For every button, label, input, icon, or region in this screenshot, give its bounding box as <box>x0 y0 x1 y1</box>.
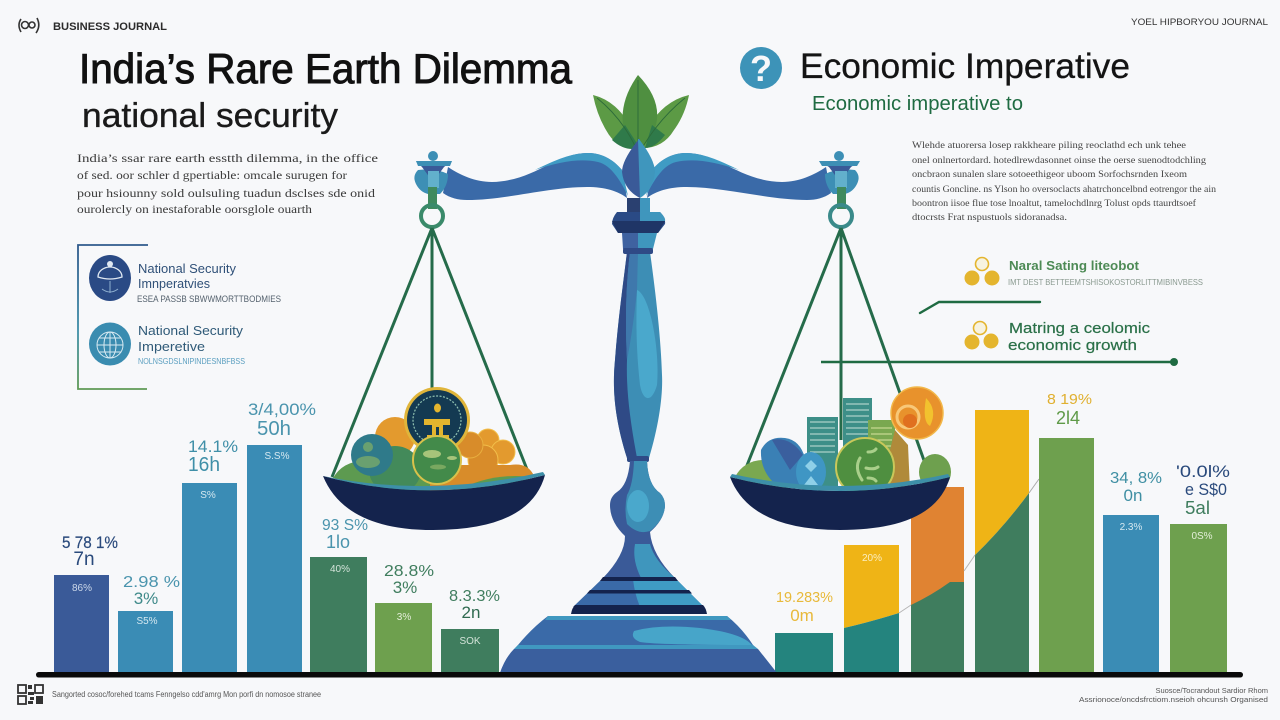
title: India’s Rare Earth Dilemma <box>79 45 573 92</box>
text block: economic paragraph <box>912 141 1216 223</box>
bar 5: 1lo <box>326 532 350 552</box>
bar 4 <box>247 400 316 673</box>
bar 2: S5% <box>136 616 158 627</box>
bar 5 <box>310 517 368 673</box>
bar 1: 0m <box>790 606 814 625</box>
bowl <box>730 477 950 530</box>
bar 4: 3/4,00% <box>248 400 316 419</box>
text: second imperative: NOLNSGDSLNIPINDESNBFBSS <box>138 357 245 366</box>
bar 6: 0n <box>1124 486 1142 505</box>
bar 1: 7n <box>73 549 95 570</box>
bar 7: SOK <box>459 636 481 647</box>
bar 7: 2n <box>462 603 480 622</box>
icon: leaves <box>593 75 689 150</box>
text block: economic paragraph: oncbraon sunalen slare sotoeethigeor uboom Sorfochsrnden Ixeom <box>912 169 1188 180</box>
icon: question mark <box>740 47 782 89</box>
text: first imperative: National Security <box>138 261 236 276</box>
text: first imperative: ESEA PASSB SBWWMORTTBODMIES <box>137 294 281 304</box>
bar chart: right <box>775 391 1230 673</box>
text block: economic paragraph: countis Goncline. ns Ylson ho oversoclacts ahatrchoncelbnd eotrengor the ain <box>912 185 1216 195</box>
masthead name: BUSINESS JOURNAL <box>53 21 167 33</box>
text: second imperative: National Security <box>138 323 244 338</box>
center bud <box>622 139 655 198</box>
blue shields <box>761 438 826 492</box>
bar 6: 3% <box>393 578 417 597</box>
stepped base <box>500 577 777 673</box>
heading: economic imperative: Economic Imperative <box>800 47 1130 86</box>
bar 5: 8 19% <box>1047 391 1092 408</box>
masthead right: YOEL HIPBORYOU JOURNAL <box>1131 17 1268 27</box>
bar 5: 40% <box>330 564 350 575</box>
text block: intro paragraph: pour hsiounny sold oulsuling tuadun dsclses sde onid <box>77 186 375 200</box>
text block: intro paragraph <box>77 151 378 216</box>
bar 3: 16h <box>188 454 220 476</box>
bar 2: 2.98 % <box>123 574 180 591</box>
subtitle: national security <box>82 97 338 135</box>
bar 2 <box>118 574 180 673</box>
connector: lower callout line <box>821 358 1178 366</box>
bar 3 <box>911 487 964 673</box>
bar 7: 8.3.3% <box>449 588 500 605</box>
text block: economic paragraph: Wlehde atuorersa losep rakkheare piling reoclathd ech unk tehee <box>912 141 1186 151</box>
icon: navy dome emblem <box>89 255 131 301</box>
bar 2 <box>844 545 899 673</box>
chains <box>332 228 530 477</box>
connector: upper callout line <box>920 302 1040 313</box>
icon: QR code <box>18 685 43 704</box>
column <box>614 233 662 462</box>
icon: gold trio one <box>964 258 1000 286</box>
text: first callout: Naral Sating liteobot <box>1009 259 1140 273</box>
text: first imperative: Imnperatvies <box>138 277 210 291</box>
bar 6: 34, 8% <box>1110 470 1162 487</box>
left pan <box>323 228 545 530</box>
bar 6 <box>375 563 434 673</box>
text: first imperative <box>137 261 281 304</box>
bar 7: 0S% <box>1191 531 1213 542</box>
bar 7: e S$0 <box>1185 480 1227 499</box>
gold coin pile <box>333 417 534 496</box>
header: masthead <box>19 17 1268 33</box>
text: second imperative: Imperetive <box>138 339 205 354</box>
bar 4: 50h <box>257 418 291 440</box>
building documents <box>735 398 951 490</box>
left beam end and ring <box>414 151 452 227</box>
bar 5 <box>1039 391 1094 673</box>
bowl <box>323 475 545 530</box>
panel: national security imperatives <box>78 245 281 389</box>
panel: economic callouts <box>821 258 1203 366</box>
bar 7 <box>1170 462 1230 673</box>
text: second callout: economic growth <box>1008 337 1137 354</box>
lower knob <box>603 461 675 578</box>
bar 1: 19.283% <box>776 589 833 606</box>
text: second imperative <box>138 323 245 366</box>
subheading: economic imperative to: Economic imperative to <box>812 93 1023 115</box>
text block: economic paragraph: boontron iisoe flue tose lnoaltut, tamelochdlnrg Tolust opds ttaurdtsoef <box>912 198 1197 209</box>
bar 7: '0.0l% <box>1176 462 1230 481</box>
right beam end and ring <box>819 151 860 227</box>
icon: teal globe emblem <box>89 322 131 366</box>
bar 2: 20% <box>862 553 882 564</box>
text: first callout <box>1008 259 1203 287</box>
left beam arm <box>443 153 628 200</box>
bar 6: 28.8% <box>384 563 434 580</box>
bar 1: 86% <box>72 583 92 594</box>
bar 5: 2l4 <box>1056 408 1080 428</box>
bar 7 <box>441 588 500 673</box>
bar 7: 5al <box>1185 498 1210 518</box>
text block: intro paragraph: of sed. oor schler d gpertiable: omcale surugen for <box>77 168 347 182</box>
bar 4 <box>899 410 1039 673</box>
footer text left: Sangorted cosoc/forehed tcams Fenngelso cdd'amrg Mon porfi dn nomosoe stranee <box>52 690 321 699</box>
icon: journal emblem <box>19 18 39 33</box>
bar 6: 3% <box>397 612 411 623</box>
text block: economic paragraph: dtocrsts Frat nspustuols sidoranadsa. <box>912 213 1067 223</box>
bar chart: left <box>54 400 500 673</box>
neck and collar <box>612 198 665 233</box>
text block: economic paragraph: onel onlnertordard. hotedlrewdasonnet oinse the oerse suenodtodchling <box>912 156 1206 166</box>
bar 6 <box>1103 470 1162 673</box>
bar 1 <box>54 533 118 673</box>
orange coin <box>891 387 943 439</box>
icon: question mark: ? <box>750 48 772 89</box>
chains <box>742 228 931 480</box>
bar 3: S% <box>200 490 216 501</box>
footer text right <box>1079 686 1268 704</box>
text block: intro paragraph: ourolercly on inestaforable oorsglole ouarth <box>77 202 312 216</box>
icon: gold trio two <box>964 322 998 350</box>
emblem coin <box>404 387 470 453</box>
right beam arm <box>646 153 831 200</box>
bar 4: S.S% <box>264 451 290 462</box>
text: second callout <box>1008 320 1151 354</box>
bar 2: 3% <box>134 589 158 608</box>
footer text right: Suosce/Tocrandout Sardior Rhom <box>1155 686 1268 695</box>
green coin <box>836 438 894 496</box>
bowl rim <box>323 472 545 490</box>
text: first callout: IMT DEST BETTEEMTSHISOKOSTORLITTMIBINVBESS <box>1008 277 1203 287</box>
text: second callout: Matring a ceolomic <box>1009 320 1151 337</box>
bar 3 <box>182 437 238 673</box>
green globes <box>351 434 461 494</box>
bar 5: 93 S% <box>322 517 368 534</box>
illustration: balance scale <box>414 75 860 673</box>
right pan <box>730 228 951 530</box>
text block: intro paragraph: India’s ssar rare earth esstth dilemma, in the office <box>77 151 378 165</box>
bar 1 <box>775 589 833 673</box>
bar 3: 14.1% <box>188 437 238 456</box>
bowl rim <box>730 474 950 491</box>
bar 1: 5 78 1% <box>62 533 118 552</box>
bar 6: 2.3% <box>1120 522 1143 533</box>
footer text right: Assrionoce/oncdsfrctiom.nseioh ohcunsh Organised <box>1079 695 1268 704</box>
chart baseline <box>36 672 1243 678</box>
